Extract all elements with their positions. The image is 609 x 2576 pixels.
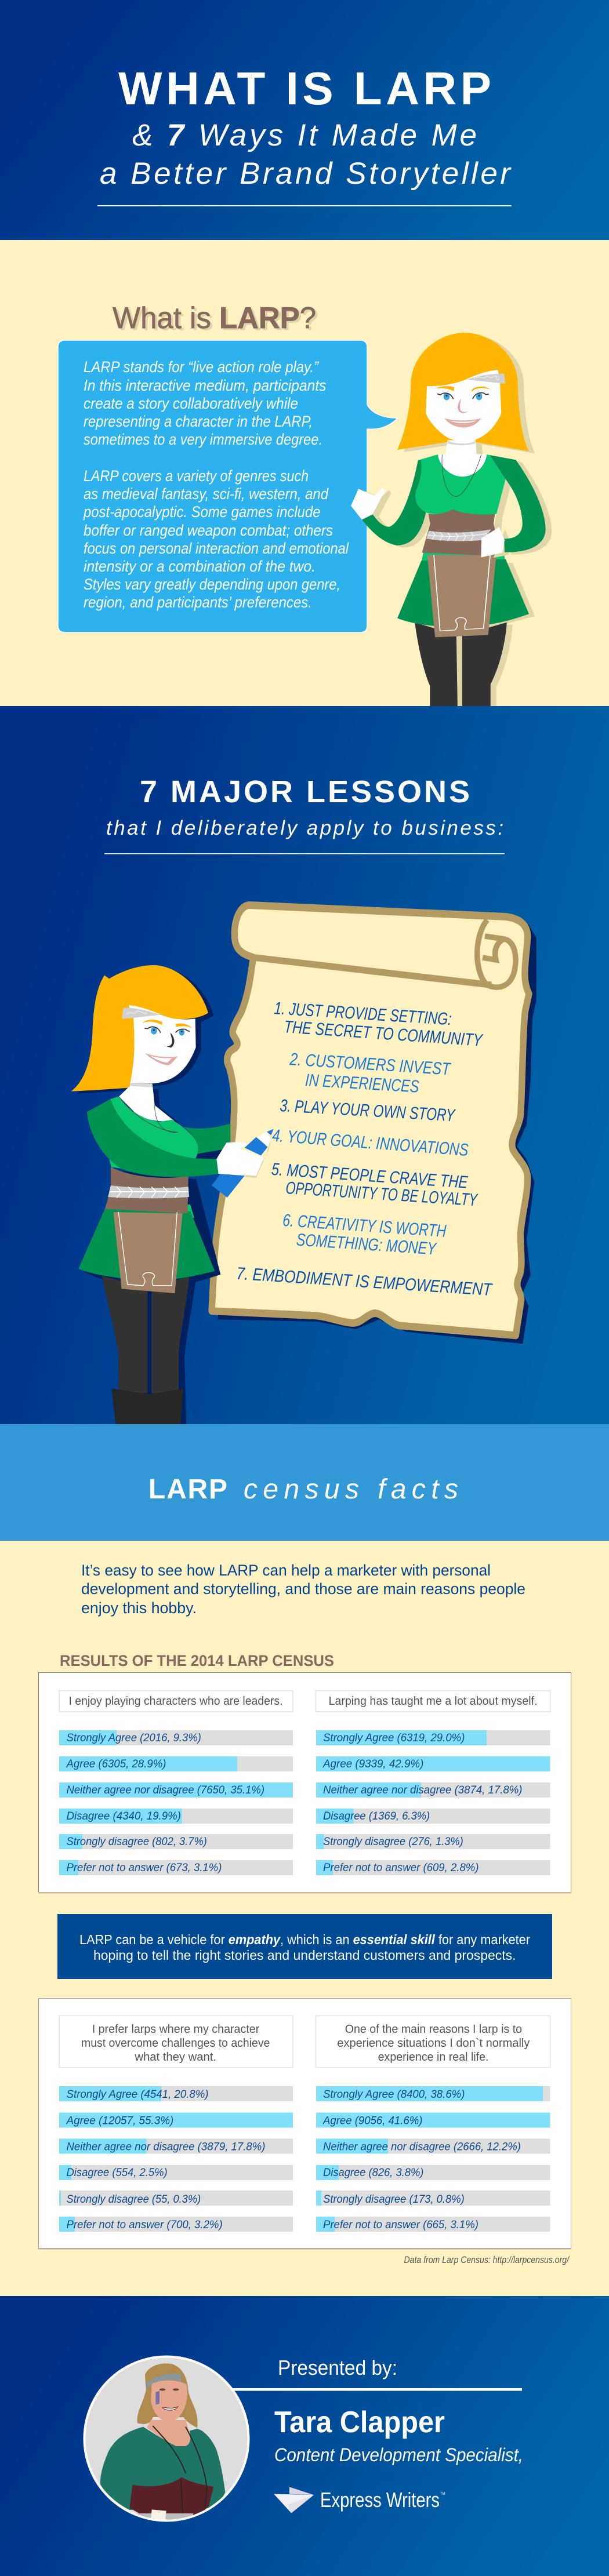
bubble text: boffer or ranged weapon combat; others: [84, 522, 333, 539]
scroll list: SOMETHING: MONEY: [296, 1230, 438, 1258]
footer panel: [0, 2296, 609, 2576]
bar chart: leaders: Strongly Agree (2016, 9.3%): [66, 1732, 201, 1744]
bar chart: challenges: Agree (12057, 55.3%): [66, 2115, 173, 2127]
question box: experience: experience situations I don`t normally: [337, 2037, 530, 2050]
question box: leaders: I enjoy playing characters who are leaders.: [68, 1695, 283, 1708]
scroll list: 7. EMBODIMENT IS EMPOWERMENT: [236, 1264, 494, 1300]
bar chart: leaders: [59, 1730, 293, 1875]
back arm: [183, 1123, 230, 1154]
bar chart: leaders: Neither agree nor disagree (7650, 35.1%): [66, 1784, 264, 1796]
heading: 7 major lessons: 7 MAJOR LESSONS: [140, 774, 470, 809]
question box: challenges: I prefer larps where my character: [92, 2023, 260, 2036]
question box: experience: experience in real life.: [378, 2051, 488, 2064]
hair: [71, 965, 208, 1091]
scroll list: THE SECRET TO COMMUNITY: [284, 1017, 484, 1050]
scroll list: 6. CREATIVITY IS WORTH: [282, 1211, 447, 1241]
title: WHAT IS LARP: [118, 63, 491, 114]
callout: empathy: LARP can be a vehicle for empathy, which is an essential skill for any marketer: [79, 1932, 530, 1947]
scroll list: OPPORTUNITY TO BE LOYALTY: [285, 1178, 478, 1210]
character upper body: [351, 333, 552, 558]
torso: [107, 1097, 198, 1170]
bubble text: focus on personal interaction and emotional: [84, 540, 349, 557]
logo: Express Writers: TM: [440, 2493, 445, 2496]
bar chart: myself: Agree (9339, 42.9%): [322, 1758, 423, 1770]
intro text: [81, 1562, 525, 1617]
bar chart: experience: Prefer not to answer (665, 3.1%): [323, 2219, 478, 2231]
heading: what is LARP: What is LARP?: [113, 301, 316, 335]
scroll curl: [477, 920, 516, 987]
bubble text: intensity or a combination of the two.: [84, 558, 316, 575]
question box: challenges: [59, 2016, 293, 2068]
bar chart: experience: Agree (9056, 41.6%): [322, 2115, 422, 2127]
bubble text: Styles vary greatly depending upon genre,: [84, 576, 340, 593]
scroll list: 4. YOUR GOAL: INNOVATIONS: [271, 1126, 469, 1160]
scroll list: 5. MOST PEOPLE CRAVE THE: [271, 1160, 469, 1192]
intro text: enjoy this hobby.: [81, 1599, 197, 1617]
bar chart: experience: Neither agree nor disagree (2666, 12.2%): [323, 2141, 521, 2153]
card: second survey charts: [38, 1999, 571, 2249]
callout: empathy: [57, 1914, 552, 1979]
scroll list: 3. PLAY YOUR OWN STORY: [280, 1096, 456, 1125]
scroll list: 1. JUST PROVIDE SETTING:: [274, 999, 452, 1029]
question box: myself: Larping has taught me a lot about myself.: [328, 1695, 537, 1708]
bubble text: LARP stands for “live action role play.”: [84, 358, 319, 376]
bar chart: myself: Disagree (1369, 6.3%): [323, 1810, 430, 1822]
hand: [216, 1142, 264, 1176]
scroll list: 2. CUSTOMERS INVEST: [289, 1050, 452, 1079]
bubble text: sometimes to a very immersive degree.: [84, 431, 322, 448]
subtitle line 2: a Better Brand Storyteller: [100, 157, 512, 191]
character lower body: [397, 551, 535, 710]
bar chart: experience: [316, 2086, 550, 2232]
bubble text: LARP covers a variety of genres such: [84, 467, 309, 485]
job title: Content Development Specialist,: [274, 2444, 523, 2465]
bar chart: challenges: Disagree (554, 2.5%): [66, 2167, 168, 2179]
bar chart: challenges: Strongly disagree (55, 0.3%): [66, 2193, 201, 2206]
face: [129, 1005, 196, 1083]
question box: myself: [316, 1690, 550, 1712]
bubble text: post-apocalyptic. Some games include: [83, 503, 320, 521]
intro text: development and storytelling, and those are main reasons people: [81, 1580, 525, 1598]
logo: Express Writers: [274, 2487, 445, 2513]
scroll: [212, 905, 536, 1344]
bar chart: challenges: Strongly Agree (4541, 20.8%): [66, 2089, 209, 2101]
portrait photo: [85, 2357, 248, 2520]
bubble text: [83, 358, 349, 611]
bar chart: leaders: Prefer not to answer (673, 3.1%): [66, 1862, 222, 1874]
bubble text: In this interactive medium, participants: [84, 377, 326, 394]
illustration: character holding pen: [71, 965, 274, 1428]
bar chart: experience: Strongly Agree (8400, 38.6%): [323, 2089, 465, 2101]
bar chart: leaders: Agree (6305, 28.9%): [66, 1758, 166, 1770]
subheading: that I deliberately apply to business:: [106, 817, 503, 839]
character lower body: [78, 1167, 220, 1428]
torso: [415, 454, 506, 515]
panel: 7 major lessons: [0, 706, 609, 1428]
neck: [119, 1086, 174, 1122]
illustration: character pointing: [351, 333, 552, 710]
bar chart: leaders: Strongly disagree (802, 3.7%): [66, 1836, 207, 1848]
bubble text: representing a character in the LARP,: [84, 413, 313, 430]
question box: challenges: must overcome challenges to achieve: [81, 2037, 270, 2050]
question box: leaders: [59, 1690, 293, 1712]
data source note: Data from Larp Census: http://larpcensus.org/: [404, 2254, 570, 2265]
bubble text: as medieval fantasy, sci-fi, western, and: [84, 485, 329, 503]
callout: empathy: hoping to tell the right stories and understand customers and prospects.: [93, 1948, 516, 1963]
bubble text: region, and participants’ preferences.: [84, 594, 312, 611]
logo: Express Writers: Express Writers: [320, 2488, 440, 2512]
hand: [351, 488, 385, 520]
bar chart: leaders: Disagree (4340, 19.9%): [66, 1810, 181, 1822]
bar chart: myself: [316, 1730, 550, 1875]
bar chart: challenges: Prefer not to answer (700, 3.2%): [66, 2219, 223, 2231]
question box: experience: One of the main reasons I larp is to: [345, 2023, 522, 2036]
bar chart: experience: Strongly disagree (173, 0.8%): [323, 2193, 465, 2206]
bubble text: create a story collaboratively while: [84, 395, 298, 412]
heading: results: RESULTS OF THE 2014 LARP CENSUS: [60, 1652, 334, 1669]
intro text: It’s easy to see how LARP can help a marketer with personal: [81, 1562, 491, 1579]
name: Tara Clapper: [274, 2406, 445, 2439]
pen: [212, 1129, 274, 1198]
question box: experience: [316, 2016, 550, 2068]
scroll list: IN EXPERIENCES: [304, 1071, 419, 1097]
panel: what is LARP: [0, 240, 609, 710]
question box: challenges: what they want.: [134, 2051, 216, 2064]
bar chart: challenges: [59, 2086, 293, 2232]
character upper body: [71, 965, 274, 1198]
bar chart: myself: Prefer not to answer (609, 2.8%): [323, 1862, 479, 1874]
card: first survey charts: [38, 1673, 571, 1893]
face: [426, 370, 501, 442]
scroll list: [236, 999, 494, 1300]
banner: LARP census facts: [0, 1424, 609, 1541]
header panel: [0, 0, 609, 240]
subtitle line 1: & 7 Ways It Made Me: [132, 118, 477, 152]
bar chart: challenges: Neither agree nor disagree (3879, 17.8%): [66, 2141, 265, 2153]
bar chart: experience: Disagree (826, 3.8%): [323, 2167, 423, 2179]
speech bubble: [58, 340, 398, 632]
bar chart: myself: Neither agree nor disagree (3874, 17.8%): [323, 1784, 522, 1796]
panel: census results: [0, 1541, 609, 2296]
bar chart: myself: Strongly disagree (276, 1.3%): [323, 1836, 463, 1848]
banner: LARP census facts: census facts: [244, 1474, 458, 1505]
banner title: LARP: [148, 1474, 227, 1505]
bar chart: myself: Strongly Agree (6319, 29.0%): [323, 1732, 465, 1744]
presented by: Presented by:: [278, 2356, 397, 2379]
